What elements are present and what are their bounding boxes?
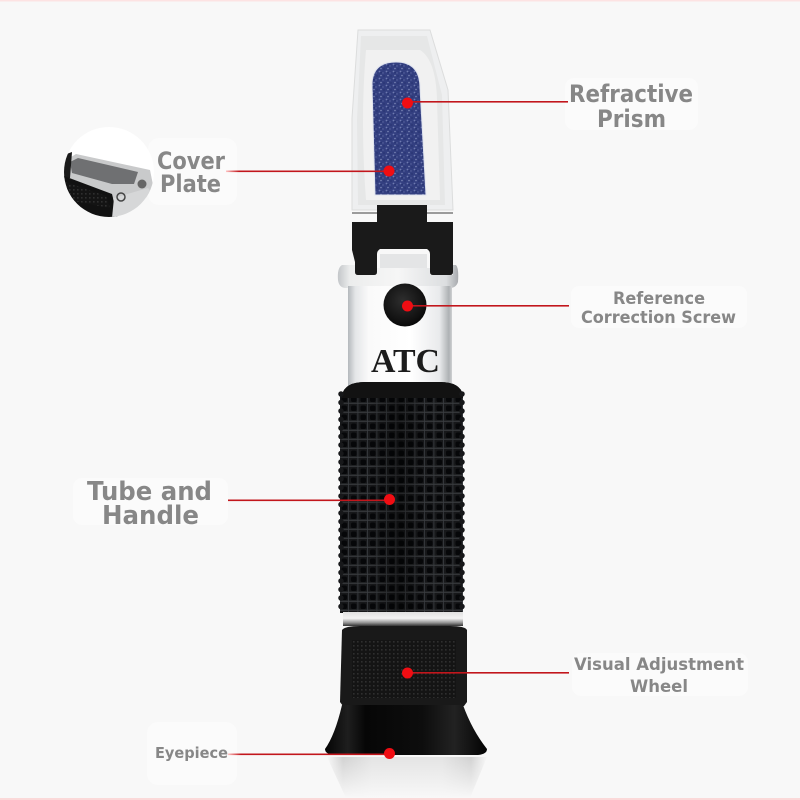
label line: cover plate bbox=[226, 170, 389, 172]
label line: visual adjustment wheel bbox=[407, 672, 569, 674]
label: refractive prism bbox=[565, 78, 698, 133]
marker: refractive prism bbox=[402, 98, 413, 108]
label line: eyepiece bbox=[228, 754, 389, 755]
refractometer device bbox=[325, 30, 488, 798]
marker: reference correction screw bbox=[402, 300, 413, 312]
silver collar bbox=[338, 254, 458, 288]
label: visual adjustment wheel: Wheel bbox=[630, 677, 688, 697]
label: eyepiece: Eyepiece bbox=[155, 744, 228, 762]
marker: cover plate bbox=[384, 166, 394, 176]
eyepiece reflection bbox=[326, 757, 488, 798]
inset: cover plate close-up bbox=[64, 152, 152, 217]
cover plate bbox=[352, 30, 453, 214]
label: cover plate: Plate bbox=[160, 170, 221, 198]
label: reference correction screw bbox=[571, 286, 747, 328]
label: visual adjustment wheel bbox=[572, 653, 748, 697]
label: tube and handle: Handle bbox=[102, 501, 199, 531]
hinge bbox=[352, 205, 453, 275]
marker: eyepiece bbox=[384, 748, 395, 759]
eyepiece bbox=[325, 705, 487, 755]
label line: refractive prism bbox=[408, 101, 568, 103]
tube and handle grip bbox=[340, 382, 463, 613]
label: reference correction screw: Reference bbox=[613, 289, 705, 309]
refractive prism bbox=[372, 62, 426, 195]
silver ring bbox=[343, 612, 463, 626]
label: reference correction screw: Correction Screw bbox=[581, 308, 736, 328]
label: visual adjustment wheel: Visual Adjustment bbox=[574, 655, 744, 675]
label: tube and handle bbox=[73, 477, 228, 531]
label line: reference correction screw bbox=[407, 305, 569, 307]
reference correction screw bbox=[384, 284, 426, 326]
marker: tube and handle bbox=[384, 494, 395, 505]
label: cover plate bbox=[148, 138, 237, 205]
ATC mark: ATC bbox=[371, 343, 440, 380]
marker: visual adjustment wheel bbox=[402, 668, 413, 678]
label: cover plate: Cover bbox=[157, 147, 225, 175]
label: tube and handle: Tube and bbox=[87, 477, 212, 507]
metal tube bbox=[348, 286, 452, 386]
label: eyepiece bbox=[147, 722, 237, 785]
visual adjustment wheel bbox=[340, 626, 467, 706]
label: refractive prism: Prism bbox=[597, 105, 666, 133]
label: refractive prism: Refractive bbox=[569, 80, 693, 108]
label line: tube and handle bbox=[228, 500, 389, 501]
